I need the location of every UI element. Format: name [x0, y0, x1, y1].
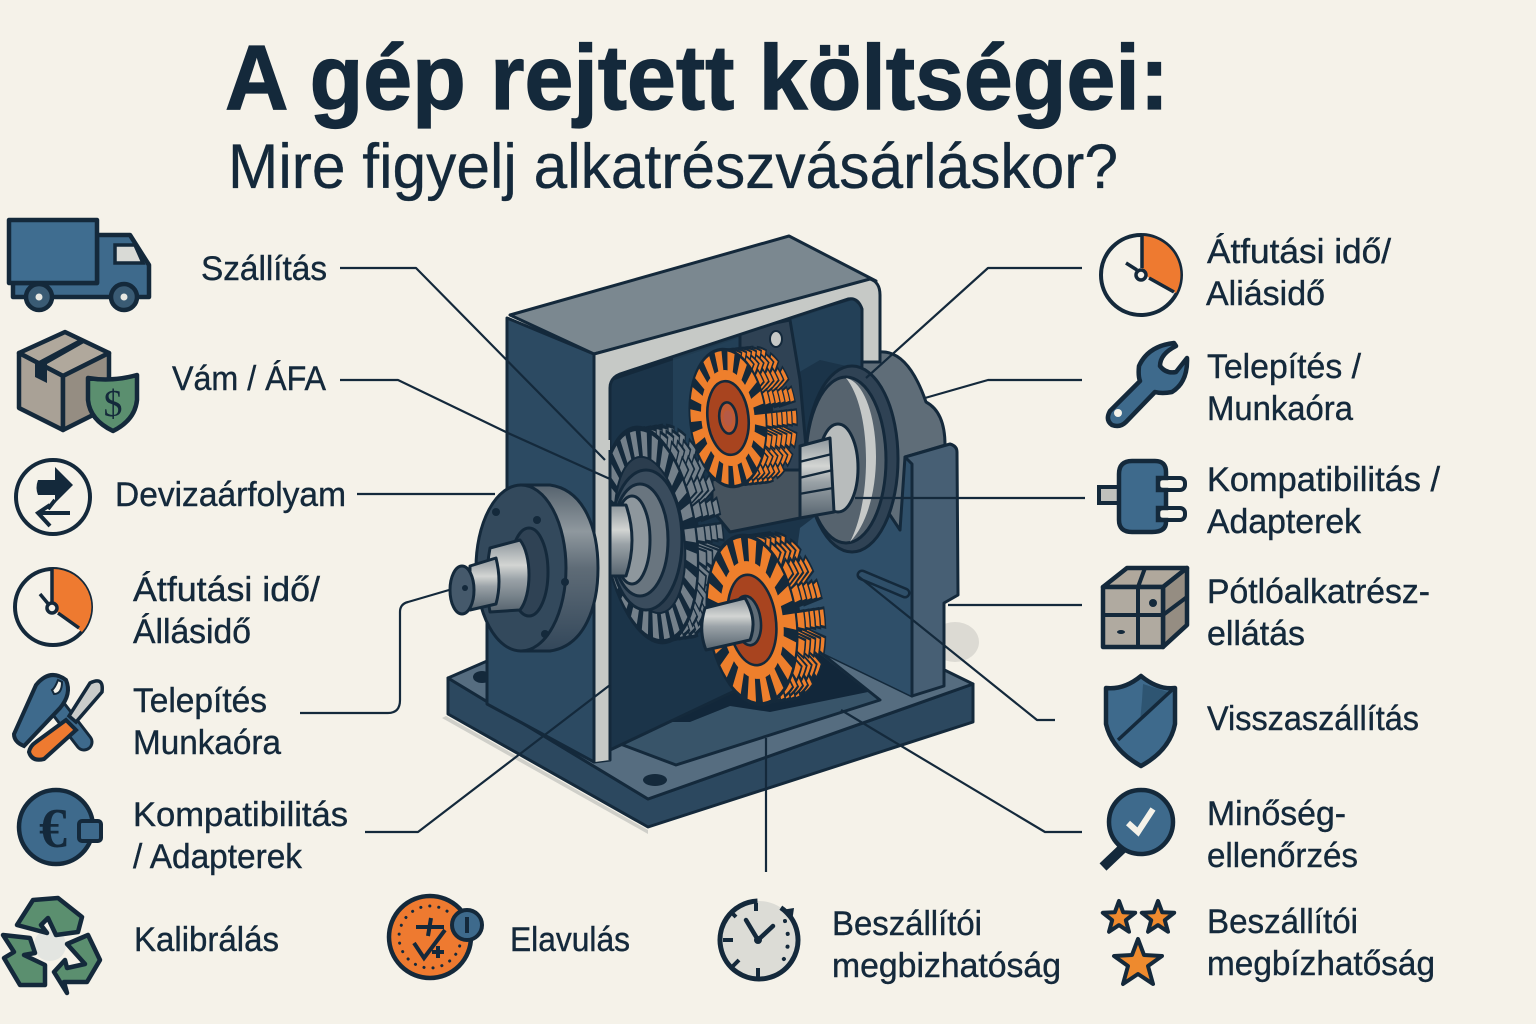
right bearing — [799, 366, 898, 552]
label: Telepítés Munkaóra: Munkaóra — [133, 724, 281, 762]
icon: euro adapter: € — [39, 798, 67, 860]
label: Minőség-ellenőrzés — [1207, 795, 1358, 875]
icon: spare parts cube — [1103, 568, 1187, 647]
icon: three stars — [1103, 901, 1174, 984]
housing top face — [510, 236, 876, 354]
right round housing — [860, 352, 945, 530]
icon: customs box with shield — [19, 332, 137, 431]
label: Kompatibilitás / Adapterek, right: Kompatibilitás / — [1207, 461, 1441, 499]
label: Kompatibilitás / Adapterek — [133, 796, 348, 876]
label: Telepítés / Munkaóra: Telepítés / — [1207, 348, 1362, 386]
label: Telepítés / Munkaóra: Munkaóra — [1207, 390, 1353, 428]
leader: Átfutási right — [866, 268, 1082, 378]
icon: currency exchange — [16, 460, 90, 534]
label: Átfutási idő / Állásidő: Állásidő — [133, 613, 251, 651]
dark gear with teeth — [599, 436, 725, 631]
left wall of housing — [487, 318, 594, 762]
interior right wall — [790, 310, 912, 696]
label: Átfutási idő / Állásidő: Átfutási idő/ — [133, 571, 321, 609]
label: Minőség-ellenőrzés: Minőség- — [1207, 795, 1346, 833]
central block — [712, 470, 800, 532]
label: Szállítás: Szállítás — [201, 250, 327, 288]
redrawn frame edge over gear — [595, 440, 610, 762]
leader: Kompatibilitás right — [855, 497, 1085, 499]
title: A gép rejtett költségei: — [225, 27, 1169, 129]
shaft through frame — [610, 505, 632, 576]
label: Beszállítói megbízhatóság, right: Beszállítói — [1207, 903, 1358, 941]
top orange gear — [690, 354, 795, 479]
icon: magnifier with check — [1103, 790, 1173, 867]
label: Vám / ÁFA: Vám / ÁFA — [172, 360, 326, 398]
recessed floor — [610, 652, 880, 765]
label: Átfutási idő / Aliásidő: Aliásidő — [1206, 275, 1325, 313]
leader: Devizaárfolyam — [357, 493, 495, 495]
label: Kompatibilitás / Adapterek: Kompatibilitás — [133, 796, 348, 834]
lower gear shaft — [702, 598, 753, 650]
rear bearing plate — [740, 320, 808, 490]
icon: obsolescence dial — [389, 896, 482, 978]
icon: euro adapter — [19, 790, 101, 864]
label: Beszállítói megbízhatóság, right: megbízhatőság — [1207, 945, 1435, 983]
leader: Kompatibilitás — [365, 685, 610, 832]
label: Kompatibilitás / Adapterek, right: Adapterek — [1207, 503, 1362, 541]
icon: clock right — [1101, 235, 1181, 315]
icon: plug adapter — [1099, 461, 1185, 532]
left flange — [450, 485, 598, 651]
label: Átfutási idő / Állásidő — [133, 571, 321, 651]
flange shaft — [510, 528, 548, 616]
label: Telepítés Munkaóra — [133, 682, 281, 762]
leader: Visszaszállítás — [858, 576, 1055, 720]
icon: clock left — [15, 568, 91, 645]
central machine illustration: gearbox — [442, 236, 979, 834]
side bracket — [905, 444, 958, 696]
label: Kompatibilitás / Adapterek: / Adapterek — [133, 838, 303, 876]
leader: Beszállítói — [765, 738, 767, 872]
label: Visszaszállítás: Visszaszállítás — [1207, 700, 1419, 738]
floor shadow — [931, 622, 979, 662]
icon: shield — [1106, 676, 1175, 766]
leader: Átfutási idő — [300, 590, 449, 713]
label: Pótlóalkatrész-ellátás: ellátás — [1207, 615, 1305, 653]
leader: Telepítés right — [925, 380, 1082, 398]
icon: customs box with shield: $ — [104, 383, 122, 425]
leader: Vám — [340, 380, 610, 479]
label: Beszállítói megbízhatóság, bottom centre — [832, 905, 1061, 985]
label: Átfutási idő / Aliásidő: Átfutási idő/ — [1207, 233, 1392, 271]
label: Átfutási idő / Aliásidő — [1206, 233, 1392, 313]
icon: supplier clock — [705, 886, 813, 994]
label: Devizaárfolyam: Devizaárfolyam — [115, 476, 346, 514]
gear hub — [610, 470, 682, 610]
label: Beszállítói megbízhatóság, right — [1207, 903, 1435, 983]
icon: wrench and screwdriver — [14, 675, 102, 760]
label: Elavulás: Elavulás — [510, 921, 630, 959]
label: Kompatibilitás / Adapterek, right — [1207, 461, 1441, 541]
housing front frame — [594, 279, 880, 762]
label: Kalibrálás: Kalibrálás — [134, 921, 279, 959]
leader: Minőség — [841, 710, 1082, 832]
subtitle: Mire figyelj alkatrészvásárláskor? — [228, 132, 1118, 202]
label: Beszállítói megbízhatóság, bottom centre: Beszállítói — [832, 905, 982, 943]
interior back wall — [610, 297, 912, 750]
label: Minőség-ellenőrzés: ellenőrzés — [1207, 837, 1358, 875]
icon: wrench — [1108, 343, 1187, 426]
label: Pótlóalkatrész-ellátás — [1207, 573, 1430, 653]
bottom orange gear — [702, 540, 825, 696]
label: Beszállítói megbízhatóság, bottom centre: megbizhatóság — [832, 947, 1061, 985]
label: Telepítés / Munkaóra — [1207, 348, 1362, 428]
icon: truck — [9, 220, 149, 310]
slot in wall — [862, 575, 905, 593]
leader: Pótlóalkatrész — [948, 604, 1082, 606]
icon: recycling — [3, 898, 100, 993]
leader: Szállítás — [340, 268, 605, 460]
leader lines — [300, 268, 1085, 872]
label: Pótlóalkatrész-ellátás: Pótlóalkatrész- — [1207, 573, 1430, 611]
base plate — [442, 560, 973, 834]
label: Telepítés Munkaóra: Telepítés — [133, 682, 267, 720]
